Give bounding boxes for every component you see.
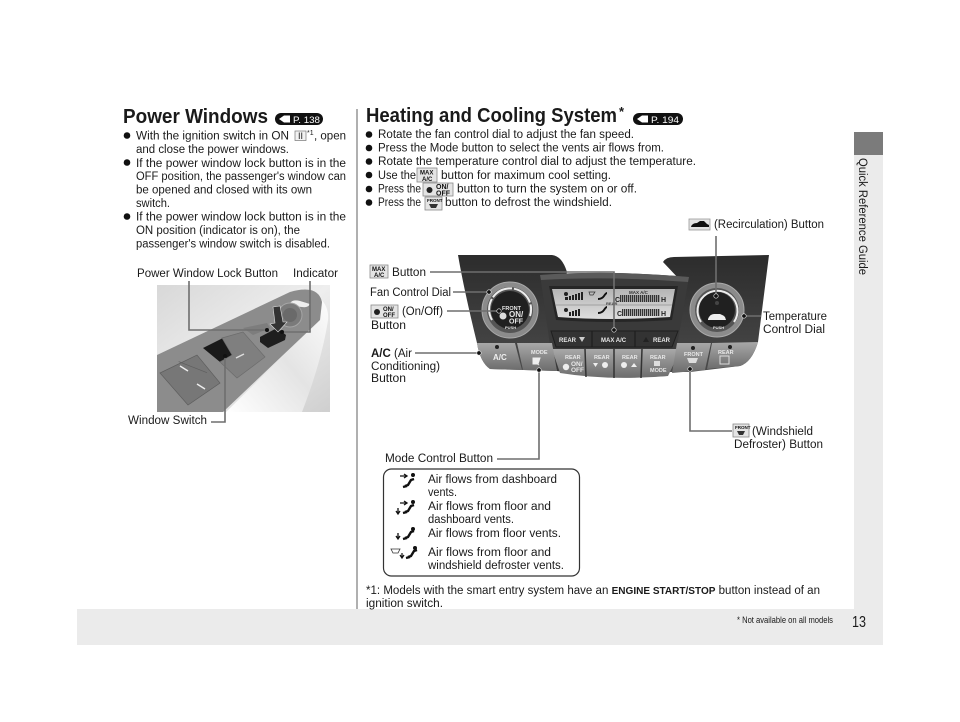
label: windshield defroster button: (Windshield	[752, 426, 813, 438]
page frame: grey side tab and footer strip	[77, 132, 883, 645]
text: floor vents: Air flows from floor vents.	[428, 528, 561, 540]
text: dashboard vents: Air flows from dashboard	[428, 474, 557, 486]
label: Power Window Lock Button	[137, 268, 278, 332]
lower row rear buttons: REAR	[650, 355, 666, 361]
text block: heating and cooling bullets: Press the	[378, 184, 421, 196]
text: floor and dashboard vents: dashboard vents.	[428, 514, 514, 526]
label: windshield defroster button: FRONT	[735, 425, 751, 430]
text: floor and dashboard vents	[428, 501, 551, 526]
lower row rear buttons	[552, 349, 681, 378]
label: temperature control dial	[742, 311, 827, 336]
top row rear / max A/C buttons: REAR	[559, 338, 577, 344]
text block: power windows bullets: OFF position, the passenger's window can	[136, 171, 346, 183]
temperature control dial	[690, 283, 744, 337]
front and rear defrost buttons: REAR	[718, 350, 734, 356]
text block: power windows bullets: If the power window lock button is in the	[136, 158, 346, 170]
text block: power windows bullets: ON position (indicator is on), the	[136, 225, 300, 237]
text: floor and windshield defroster: windshield defroster vents.	[427, 560, 564, 572]
text block: power windows bullets: , open	[314, 130, 346, 142]
label: mode control button	[385, 368, 541, 465]
label: A/C button: A/C (Air	[371, 348, 412, 360]
icon: floor and dashboard vents	[396, 500, 415, 514]
label: on/off button	[371, 305, 501, 332]
A/C and mode buttons: A/C	[493, 353, 507, 362]
label: MAX A/C button: MAX	[372, 267, 385, 273]
text block: power windows bullets: With the ignition switch in ON	[136, 130, 289, 142]
label: fan control dial: Fan Control Dial	[370, 287, 451, 299]
label: mode control button: Mode Control Button	[385, 453, 493, 465]
side tab label: Quick Reference Guide	[856, 158, 868, 275]
text: dashboard vents	[428, 474, 557, 499]
text block: heating and cooling bullets: Use the	[378, 170, 416, 182]
text: dashboard vents: vents.	[428, 487, 457, 499]
lower row rear buttons: ON/	[571, 361, 583, 368]
LCD display: MAX A/C	[629, 290, 649, 295]
temperature control dial: PUSH	[713, 325, 724, 330]
fan control dial: PUSH	[505, 325, 516, 330]
label: Window Switch: Window Switch	[128, 415, 207, 427]
top row rear / max A/C buttons	[551, 331, 678, 347]
label: Power Window Lock Button: Power Window Lock Button	[137, 268, 278, 280]
label: on/off button: OFF	[383, 313, 395, 319]
fan control dial: FRONT	[502, 306, 522, 312]
text block: heating and cooling bullets: button for maximum cool setting.	[441, 170, 611, 182]
footnote: smart entry: ignition switch.	[366, 598, 443, 610]
label: temperature control dial: Temperature	[763, 311, 827, 323]
footnote: smart entry	[366, 585, 820, 610]
label: recirculation button	[689, 219, 824, 298]
text block: heating and cooling bullets: button to turn the system on or off.	[457, 184, 637, 196]
label: A/C button: Conditioning)	[371, 361, 440, 373]
text: floor and windshield defroster: Air flows from floor and	[428, 547, 551, 559]
lower row rear buttons: OFF	[571, 367, 584, 374]
label: A/C button: Button	[371, 373, 406, 385]
icon: floor vents	[396, 527, 415, 539]
heading: Heating and Cooling System: *	[619, 104, 625, 119]
label: recirculation button: (Recirculation) Button	[714, 219, 824, 231]
label: A/C button	[371, 348, 481, 385]
text block: heating and cooling bullets: Press the	[378, 197, 421, 209]
LCD display: C	[617, 311, 622, 318]
text block: power windows bullets: If the power window lock button is in the	[136, 212, 346, 224]
text block: heating and cooling bullets: Rotate the temperature control dial to adjust the temperature.	[378, 156, 696, 168]
text: floor and windshield defroster	[427, 547, 564, 572]
label: fan control dial	[370, 287, 491, 299]
text block: heating and cooling bullets: MAX	[420, 170, 433, 176]
label: temperature control dial: Control Dial	[763, 324, 825, 336]
text block: heating and cooling bullets: ON/	[436, 184, 448, 191]
text block: power windows bullets	[124, 130, 346, 250]
label: on/off button: (On/Off)	[402, 306, 443, 318]
icon: dashboard vents	[400, 473, 415, 487]
climate control panel	[458, 255, 769, 378]
text block: heating and cooling bullets: button to defrost the windshield.	[445, 197, 612, 209]
text block: power windows bullets: be opened and closed with its own	[136, 184, 312, 196]
center section	[540, 273, 689, 377]
LCD display	[549, 286, 678, 322]
heading: Heating and Cooling System: P. 194	[651, 115, 679, 126]
A/C and mode buttons	[477, 343, 557, 371]
label: on/off button: ON/	[383, 307, 394, 313]
lower row rear buttons: REAR	[622, 355, 638, 361]
fan control dial: OFF	[509, 318, 524, 326]
text block: power windows bullets: switch.	[136, 198, 170, 210]
photo: door window switch panel	[157, 285, 330, 412]
label: Indicator: Indicator	[293, 268, 338, 280]
heading: Heating and Cooling System: Heating and Cooling System	[366, 105, 617, 127]
lower row rear buttons: MODE	[650, 368, 667, 374]
text block: power windows bullets: passenger's window switch is disabled.	[136, 238, 330, 250]
text block: heating and cooling bullets: A/C	[422, 177, 433, 183]
lower row rear buttons: REAR	[565, 355, 581, 361]
footnote: not available: * Not available on all models	[737, 615, 833, 625]
left dark section	[458, 255, 567, 371]
label: MAX A/C button	[370, 265, 616, 332]
LCD display: H	[661, 311, 666, 318]
page number: 13	[852, 614, 866, 631]
LCD display: H	[661, 297, 666, 304]
text block: power windows bullets: *1	[307, 130, 314, 137]
text block: heating and cooling bullets: FRONT	[427, 198, 443, 203]
label: MAX A/C button: A/C	[374, 273, 385, 279]
icon: floor and windshield defroster	[391, 546, 417, 558]
right dark section	[663, 255, 769, 372]
label: MAX A/C button: Button	[392, 267, 426, 279]
front and rear defrost buttons: FRONT	[684, 352, 704, 358]
LCD display: C	[615, 297, 620, 304]
top row rear / max A/C buttons: MAX A/C	[601, 338, 627, 344]
text: floor and dashboard vents: Air flows from floor and	[428, 501, 551, 513]
front and rear defrost buttons	[672, 342, 758, 373]
footnote: smart entry: *1: Models with the smart entry system have an ENGINE START/STOP button instead of an	[366, 585, 820, 597]
column divider	[356, 109, 358, 609]
label: on/off button: Button	[371, 320, 406, 332]
text block: heating and cooling bullets: OFF	[436, 190, 451, 198]
LCD display: REAR	[606, 301, 617, 306]
A/C and mode buttons: MODE	[531, 350, 548, 356]
label: Window Switch	[128, 354, 227, 427]
text block: heating and cooling bullets: Rotate the fan control dial to adjust the fan speed.	[378, 129, 634, 141]
lower row rear buttons: REAR	[594, 355, 610, 361]
legend box: air flow modes	[384, 469, 580, 576]
text block: power windows bullets: II	[298, 131, 303, 141]
heading: Power Windows: P. 138	[293, 115, 320, 126]
text block: heating and cooling bullets: Press the Mode button to select the vents air flows from.	[378, 142, 664, 154]
label: Indicator	[280, 268, 338, 334]
fan control dial: ON/	[509, 310, 524, 319]
label: windshield defroster button	[688, 367, 823, 451]
top row rear / max A/C buttons: REAR	[653, 338, 671, 344]
text block: heating and cooling bullets	[366, 129, 696, 210]
fan control dial	[482, 282, 538, 338]
label: windshield defroster button: Defroster) Button	[734, 439, 823, 451]
heading: Power Windows: Power Windows	[123, 106, 268, 128]
text block: power windows bullets: and close the power windows.	[136, 144, 289, 156]
